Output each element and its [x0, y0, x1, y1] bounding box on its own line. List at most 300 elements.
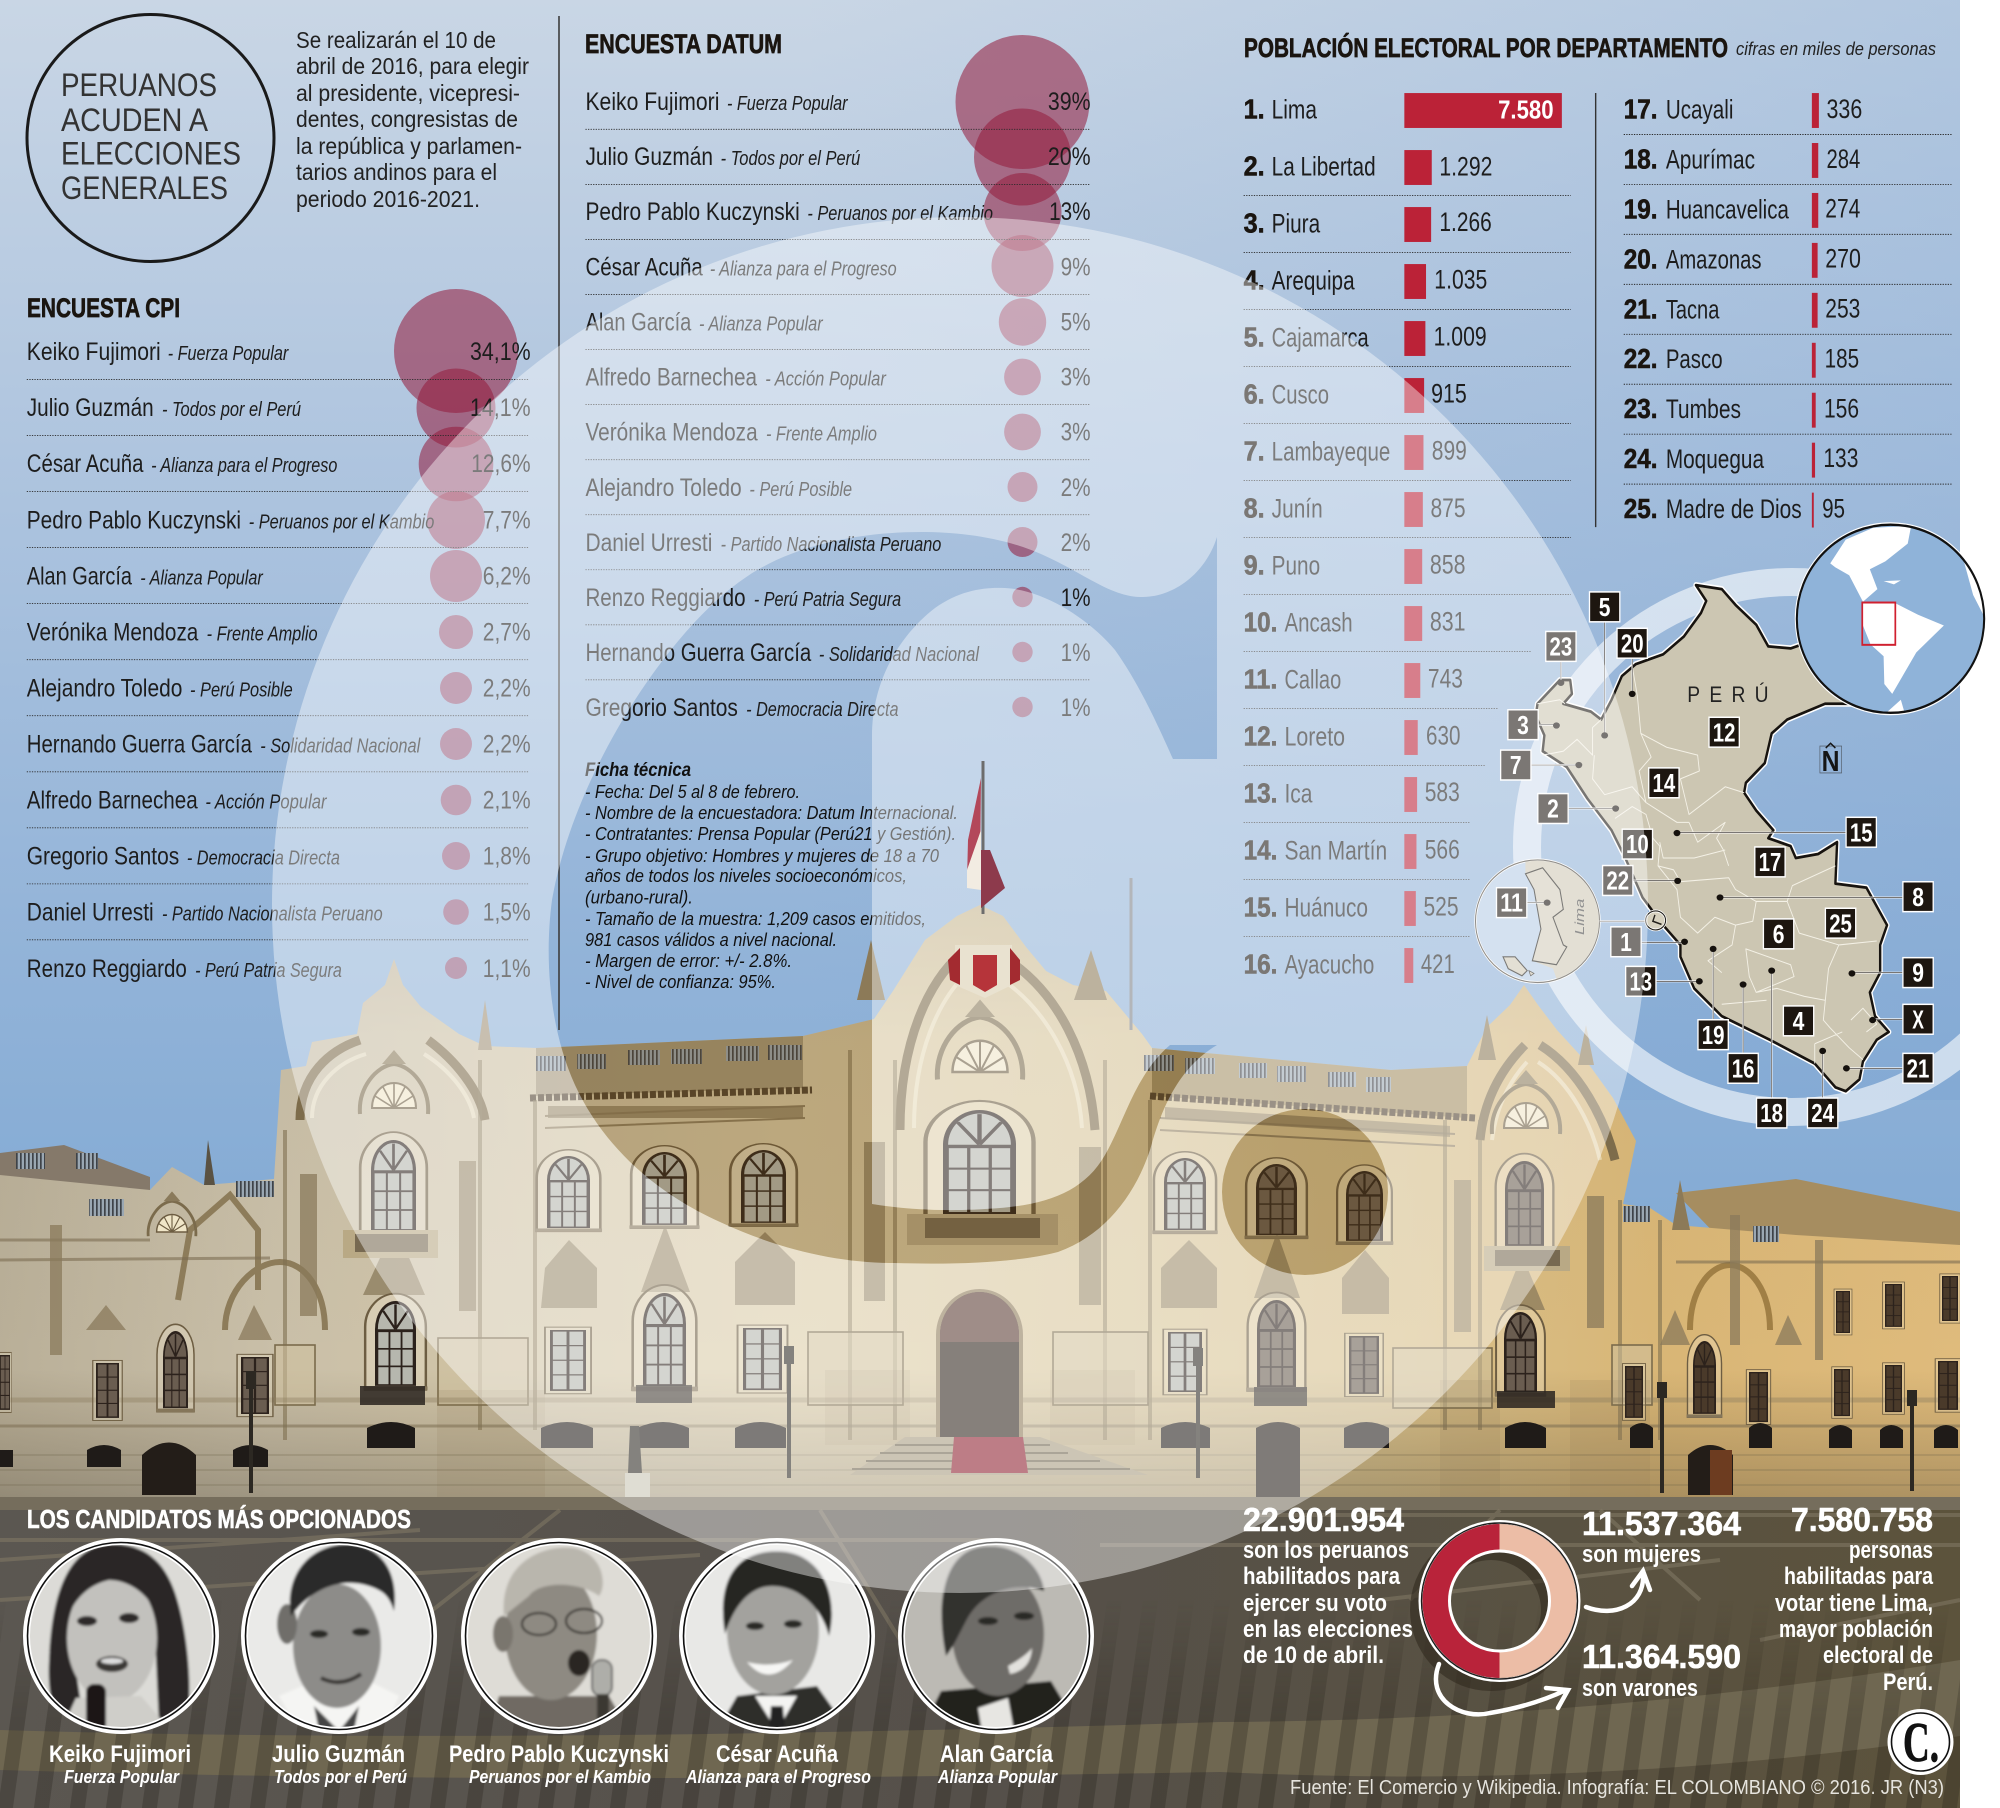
stat: Lima voters: habilitadas para [1784, 1563, 1934, 1590]
row: Moquegua: 133 [1823, 444, 1858, 474]
stat: total voters: habilitados para [1243, 1563, 1401, 1590]
row: Ica: 13. [1244, 777, 1277, 809]
row: Junín: 875 [1430, 494, 1466, 523]
title circle: ELECCIONES [61, 136, 241, 172]
row: Daniel Urresti: 1,5% [483, 899, 531, 927]
caption: Alan García: Alianza Popular [937, 1766, 1059, 1787]
map: department borders [1537, 666, 1877, 1064]
row: Moquegua [1624, 443, 1858, 478]
heading: población electoral: cifras en miles de personas [1736, 39, 1936, 59]
row: Cusco: 915 [1431, 379, 1467, 409]
row: Verónika Mendoza: 2,7% [483, 619, 531, 647]
row: Puno: 858 [1430, 550, 1466, 580]
caption: Keiko Fujimori [49, 1741, 191, 1787]
row: Pedro Pablo Kuczynski: - Peruanos por el Kambio [249, 511, 434, 533]
row: César Acuña: 9% [1061, 254, 1091, 281]
row: Alan García: Alan García [27, 563, 133, 590]
map: numbered department labels [1497, 592, 1933, 1128]
row: Pedro Pablo Kuczynski: 7,7% [483, 507, 531, 534]
row: Junín: 8. [1244, 492, 1265, 524]
row: Ayacucho: 16. [1244, 948, 1277, 980]
map: numbered department labels: 17 [1759, 849, 1781, 877]
row: Alfredo Barnechea: - Acción Popular [765, 368, 887, 390]
text block: ficha técnica: - Fecha: Del 5 al 8 de febrero. [585, 781, 800, 802]
stat: women: son mujeres [1582, 1541, 1701, 1568]
portrait: Keiko Fujimori [23, 1538, 219, 1734]
intro paragraph: Se realizarán el 10 de [296, 27, 496, 53]
row: Apurímac [1624, 143, 1860, 178]
row: Renzo Reggiardo [27, 955, 531, 983]
row: Piura: 3. [1244, 207, 1265, 239]
row: Hernando Guerra García: Hernando Guerra García [585, 640, 812, 667]
row: Gregorio Santos: Gregorio Santos [27, 843, 179, 871]
row: Puno: 9. [1244, 549, 1265, 581]
row: Tumbes: 156 [1824, 394, 1859, 424]
stat: women: 11.537.364 [1582, 1505, 1742, 1542]
row: Cusco: Cusco [1272, 380, 1329, 410]
intro paragraph [296, 27, 529, 212]
table: población electoral 17 to 25 [1596, 93, 1952, 528]
row: Alfredo Barnechea: - Acción Popular [205, 791, 328, 814]
row: Verónika Mendoza: Verónika Mendoza [27, 619, 199, 647]
row: Puno [1244, 549, 1466, 584]
row: Lima: 7.580 [1498, 96, 1554, 125]
row: Puno: Puno [1272, 551, 1320, 581]
caption: Julio Guzmán: Todos por el Perú [274, 1766, 407, 1787]
title circle [27, 14, 274, 262]
row: San Martín: 14. [1244, 834, 1277, 866]
row: Ancash [1244, 606, 1466, 641]
table: Encuesta Datum rows [585, 89, 1091, 722]
table: Encuesta CPI rows [27, 339, 531, 983]
text block: ficha técnica: - Nivel de confianza: 95%. [585, 971, 776, 992]
row: Arequipa: Arequipa [1272, 266, 1355, 296]
row: Keiko Fujimori [585, 89, 1091, 116]
row: Arequipa: 1.035 [1434, 265, 1487, 295]
row: Verónika Mendoza: - Frente Amplio [766, 423, 877, 446]
row: Verónika Mendoza: Verónika Mendoza [585, 419, 758, 447]
portrait: Alan García [898, 1538, 1094, 1734]
intro paragraph: periodo 2016-2021. [296, 186, 480, 212]
map: numbered department labels: 23 [1550, 633, 1572, 662]
stat: total voters: son los peruanos [1243, 1537, 1409, 1564]
portrait: César Acuña [679, 1538, 875, 1734]
row: Ancash: 831 [1430, 607, 1466, 637]
row: César Acuña [585, 254, 1091, 281]
row: Gregorio Santos [585, 695, 1091, 722]
row: Amazonas: 270 [1825, 244, 1861, 274]
intro paragraph: dentes, congresistas de [296, 106, 518, 132]
map: numbered department labels: 24 [1811, 1100, 1834, 1128]
row: Alfredo Barnechea: Alfredo Barnechea [27, 787, 198, 815]
stat: total voters: en las elecciones [1243, 1616, 1413, 1643]
source credit: Fuente: El Comercio y Wikipedia. Infografía: EL COLOMBIANO © 2016. JR (N3) [1290, 1777, 1944, 1799]
row: Lima: 1. [1244, 93, 1265, 125]
row: Hernando Guerra García: 2,2% [483, 731, 531, 759]
map: numbered department labels: 4 [1793, 1008, 1805, 1036]
row: Lambayeque: Lambayeque [1272, 437, 1390, 467]
row: Keiko Fujimori: 34,1% [470, 339, 531, 366]
row: Moquegua: Moquegua [1666, 445, 1765, 475]
map: numbered department labels: 5 [1599, 594, 1611, 622]
row: Callao: 743 [1428, 664, 1463, 694]
map: country shape [1536, 585, 1889, 1091]
row: Piura: Piura [1272, 209, 1321, 239]
row: Pedro Pablo Kuczynski: - Peruanos por el Kambio [807, 203, 993, 225]
map: country outline [1536, 585, 1889, 1091]
stat: Lima voters: electoral de [1823, 1642, 1933, 1669]
row: Cajamarca: Cajamarca [1272, 323, 1369, 353]
row: Huánuco: 15. [1244, 891, 1277, 923]
row: Verónika Mendoza [585, 419, 1091, 447]
row: Daniel Urresti: - Partido Nacionalista Peruano [162, 903, 383, 926]
title circle: PERUANOS [61, 67, 217, 103]
map: numbered department labels: 15 [1850, 819, 1873, 848]
caption: Keiko Fujimori: Fuerza Popular [64, 1766, 181, 1787]
title circle: ACUDEN A [61, 102, 209, 138]
donut chart: women and men [1420, 1522, 1578, 1680]
row: César Acuña: 12,6% [471, 451, 531, 478]
row: Huánuco: 525 [1423, 892, 1459, 922]
caption: Pedro Pablo Kuczynski [449, 1741, 669, 1787]
building main door [936, 1289, 1023, 1440]
row: Ica: Ica [1284, 779, 1313, 809]
row: Apurímac: 284 [1827, 145, 1860, 174]
map: numbered department labels: 3 [1517, 711, 1529, 740]
row: César Acuña: - Alianza para el Progreso [710, 258, 897, 280]
row: La Libertad: 1.292 [1439, 152, 1492, 182]
row: Daniel Urresti: 2% [1061, 530, 1091, 557]
photo: Palacio de Gobierno building [0, 878, 1961, 1505]
map: numbered department labels: 11 [1500, 889, 1523, 918]
row: Huánuco [1244, 891, 1459, 926]
map: numbered department labels: 12 [1713, 719, 1736, 748]
locator rectangle on globe [1862, 603, 1895, 645]
row: Tacna [1624, 293, 1860, 328]
row: Lima [1244, 93, 1562, 128]
row: Cajamarca: 1.009 [1434, 322, 1487, 352]
row: Renzo Reggiardo: - Perú Patria Segura [754, 589, 901, 611]
row: San Martín: 566 [1425, 835, 1460, 865]
row: Julio Guzmán: Julio Guzmán [27, 395, 154, 422]
row: Pedro Pablo Kuczynski: Pedro Pablo Kuczynski [27, 507, 241, 534]
row: Alfredo Barnechea: 3% [1061, 364, 1091, 391]
row: Tacna: 21. [1624, 293, 1658, 325]
text block: ficha técnica: - Contratantes: Prensa Popular (Perú21 y Gestión). [585, 823, 956, 844]
row: Julio Guzmán: - Todos por el Perú [721, 148, 860, 170]
second flagpole [1130, 878, 1132, 1030]
row: Renzo Reggiardo: Renzo Reggiardo [27, 955, 187, 983]
row: Gregorio Santos [27, 843, 531, 871]
locator globe [1795, 522, 1990, 724]
row: Alfredo Barnechea: Alfredo Barnechea [585, 364, 758, 391]
row: Alfredo Barnechea [27, 787, 531, 815]
map: numbered department labels: 14 [1653, 770, 1676, 798]
row: Madre de Dios: 95 [1822, 494, 1845, 524]
map: numbered department labels: 13 [1629, 968, 1652, 997]
row: La Libertad [1244, 150, 1492, 185]
row: Gregorio Santos: 1% [1061, 695, 1091, 722]
heading: Encuesta Datum: ENCUESTA DATUM [585, 29, 782, 59]
row: Pasco: 185 [1825, 344, 1859, 374]
flag of Peru [967, 761, 1005, 914]
map: numbered department labels: 18 [1760, 1100, 1783, 1128]
row: Keiko Fujimori [27, 339, 531, 366]
row: Huancavelica: 274 [1825, 194, 1860, 224]
portrait: Julio Guzmán [241, 1538, 437, 1734]
portrait: Pedro Pablo Kuczynski [461, 1538, 657, 1734]
text block: ficha técnica: Ficha técnica [585, 760, 691, 781]
row: Keiko Fujimori: Keiko Fujimori [27, 339, 161, 366]
bubble chart: Datum [956, 35, 1090, 717]
text block: ficha técnica: 981 casos válidos a nivel nacional. [585, 929, 837, 950]
row: Madre de Dios [1624, 493, 1845, 528]
row: Piura: 1.266 [1439, 208, 1492, 238]
row: Renzo Reggiardo [585, 585, 1091, 612]
row: Lambayeque [1244, 435, 1467, 470]
row: Amazonas: 20. [1624, 243, 1658, 275]
heading: Encuesta CPI: ENCUESTA CPI [27, 293, 180, 323]
map: numbered department labels: 21 [1907, 1055, 1929, 1084]
row: Amazonas [1624, 243, 1861, 278]
caption: Alan García [937, 1741, 1059, 1787]
row: Tumbes [1624, 393, 1859, 428]
row: Hernando Guerra García: Hernando Guerra García [27, 731, 252, 759]
heading: población electoral: POBLACIÓN ELECTORAL POR DEPARTAMENTO [1244, 32, 1728, 63]
row: Ayacucho: 421 [1421, 949, 1455, 979]
row: Hernando Guerra García: - Solidaridad Nacional [260, 735, 421, 758]
map: leader lines [1525, 621, 1904, 1099]
watermark: large translucent C logo [272, 217, 1648, 1593]
map of Peru [1475, 585, 1933, 1128]
spires on the roof [204, 940, 1690, 1230]
row: Cajamarca: 5. [1244, 321, 1265, 353]
row: Madre de Dios: Madre de Dios [1666, 495, 1802, 524]
row: Huánuco: Huánuco [1284, 893, 1368, 923]
row: Hernando Guerra García [585, 640, 1091, 667]
row: Julio Guzmán [27, 395, 531, 422]
stat: total voters: ejercer su voto [1243, 1590, 1387, 1617]
row: Cusco [1244, 378, 1467, 413]
caption: Keiko Fujimori: Keiko Fujimori [49, 1741, 191, 1768]
row: Daniel Urresti: - Partido Nacionalista Peruano [721, 534, 941, 556]
row: Ancash: Ancash [1284, 608, 1353, 638]
map: numbered department labels: 8 [1912, 883, 1924, 912]
map: numbered department labels: 20 [1621, 630, 1644, 659]
row: Alfredo Barnechea [585, 364, 1091, 391]
row: San Martín: San Martín [1284, 836, 1387, 866]
row: Lima: Lima [1272, 95, 1318, 125]
row: Ayacucho: Ayacucho [1284, 950, 1374, 980]
row: Alejandro Toledo [27, 675, 531, 703]
caption: César Acuña [685, 1741, 871, 1787]
row: San Martín [1244, 834, 1460, 869]
row: Piura [1244, 207, 1492, 242]
row: Lambayeque: 899 [1432, 436, 1467, 466]
row: Alan García [585, 309, 1091, 336]
row: Pedro Pablo Kuczynski [27, 507, 531, 534]
row: Madre de Dios: 25. [1624, 493, 1658, 524]
row: La Libertad: 2. [1244, 150, 1265, 182]
title circle: GENERALES [61, 170, 228, 206]
row: Lambayeque: 7. [1244, 435, 1265, 467]
row: Daniel Urresti [27, 899, 531, 927]
map: numbered department labels: 6 [1773, 921, 1784, 949]
row: Cajamarca [1244, 321, 1487, 356]
text block: ficha técnica: - Nombre de la encuestadora: Datum Internacional. [585, 802, 958, 823]
text block: ficha técnica: - Margen de error: +/- 2.8%. [585, 950, 792, 971]
row: Keiko Fujimori: Keiko Fujimori [585, 89, 719, 116]
row: César Acuña: César Acuña [27, 451, 144, 478]
row: Alan García: 5% [1061, 309, 1091, 336]
caption: Pedro Pablo Kuczynski: Peruanos por el Kambio [469, 1766, 651, 1787]
map: north symbol: N [1822, 745, 1840, 777]
row: Verónika Mendoza: 3% [1061, 419, 1091, 447]
intro paragraph: la república y parlamen- [296, 133, 522, 159]
row: Junín [1244, 492, 1466, 527]
row: Julio Guzmán: - Todos por el Perú [162, 399, 301, 421]
intro paragraph: al presidente, vicepresi- [296, 80, 520, 106]
row: Julio Guzmán: 14,1% [470, 395, 531, 422]
stat: Lima voters: 7.580.758 [1791, 1501, 1933, 1538]
logo: El Colombiano [1888, 1709, 1954, 1775]
row: Alejandro Toledo: - Perú Posible [749, 478, 852, 501]
row: Julio Guzmán: 20% [1048, 144, 1091, 171]
row: Callao: Callao [1284, 665, 1341, 695]
stat: total voters: 22.901.954 [1243, 1501, 1405, 1538]
stat: Lima voters: Perú. [1883, 1669, 1933, 1696]
map: numbered department labels: 7 [1510, 752, 1522, 781]
caption: César Acuña: Alianza para el Progreso [685, 1766, 871, 1787]
table: población electoral 1 to 16 [1244, 93, 1571, 983]
text block: ficha técnica: años de todos los niveles socioeconómicos, [585, 865, 907, 886]
row: Ica [1244, 777, 1460, 812]
text block: ficha técnica: - Tamaño de la muestra: 1,209 casos emitidos, [585, 908, 926, 929]
row: Alan García: Alan García [585, 309, 692, 336]
main stairs [850, 1437, 1148, 1475]
row: Gregorio Santos: - Democracia Directa [746, 699, 899, 721]
row: Gregorio Santos: 1,8% [483, 843, 531, 871]
row: Renzo Reggiardo: 1% [1061, 585, 1091, 612]
row: Moquegua: 24. [1624, 443, 1658, 475]
row: Renzo Reggiardo: 1,1% [483, 955, 531, 983]
map: numbered department labels: 2 [1547, 795, 1559, 824]
right page margin [1960, 0, 2000, 1808]
row: Apurímac: 18. [1624, 143, 1658, 175]
central coat of arms [948, 945, 1020, 998]
map: numbered department labels: 25 [1829, 910, 1852, 939]
row: Gregorio Santos: Gregorio Santos [585, 695, 738, 722]
row: Daniel Urresti: Daniel Urresti [585, 530, 712, 557]
row: Gregorio Santos: - Democracia Directa [187, 847, 340, 870]
row: Callao [1244, 663, 1463, 698]
heading: los candidatos más opcionados: LOS CANDIDATOS MÁS OPCIONADOS [27, 1504, 411, 1534]
intro paragraph: abril de 2016, para elegir [296, 53, 529, 79]
row: Hernando Guerra García: - Solidaridad Nacional [819, 644, 980, 666]
row: Callao: 11. [1244, 663, 1277, 695]
stat: Lima voters: votar tiene Lima, [1775, 1590, 1933, 1617]
map: numbered department labels: 16 [1732, 1055, 1754, 1084]
row: Verónika Mendoza [27, 619, 531, 647]
row: Alejandro Toledo: 2,2% [483, 675, 531, 703]
row: Alan García: - Alianza Popular [699, 313, 824, 335]
map: country name: PERÚ [1687, 683, 1769, 707]
row: Ucayali [1624, 93, 1862, 128]
row: Alan García: - Alianza Popular [140, 567, 264, 589]
stat: men: son varones [1582, 1675, 1698, 1702]
row: Alejandro Toledo: Alejandro Toledo [27, 675, 182, 703]
row: Julio Guzmán [585, 144, 1091, 171]
row: Alan García [27, 563, 531, 590]
row: Alan García: 6,2% [483, 563, 531, 590]
caption: César Acuña: César Acuña [716, 1741, 839, 1768]
row: César Acuña [27, 451, 531, 478]
row: Ucayali: Ucayali [1666, 95, 1733, 125]
row: Tacna: Tacna [1666, 295, 1720, 325]
row: Pasco [1624, 343, 1859, 378]
intro paragraph: tarios andinos para el [296, 159, 497, 185]
map: numbered department labels: 9 [1912, 959, 1924, 988]
map: numbered department labels: 1 [1620, 928, 1632, 957]
row: Keiko Fujimori: - Fuerza Popular [168, 343, 290, 365]
stat: men [1582, 1638, 1741, 1702]
row: Alejandro Toledo: - Perú Posible [190, 679, 293, 702]
row: Loreto [1244, 720, 1460, 755]
row: Renzo Reggiardo: Renzo Reggiardo [585, 585, 746, 612]
bubble chart: CPI [394, 289, 518, 979]
row: Hernando Guerra García: 1% [1061, 640, 1091, 667]
map: numbered department labels: 10 [1626, 831, 1649, 860]
row: Arequipa: 4. [1244, 264, 1265, 296]
row: Verónika Mendoza: - Frente Amplio [207, 623, 318, 646]
row: Huancavelica [1624, 193, 1860, 228]
stat: men: 11.364.590 [1582, 1638, 1741, 1675]
map: numbered department labels: 19 [1702, 1021, 1724, 1050]
row: Huancavelica: Huancavelica [1666, 195, 1790, 225]
arrow to women [1586, 1571, 1650, 1611]
row: Keiko Fujimori: 39% [1048, 89, 1091, 116]
row: Renzo Reggiardo: - Perú Patria Segura [195, 959, 342, 982]
candidate names [49, 1741, 1059, 1787]
row: Julio Guzmán: Julio Guzmán [585, 144, 713, 171]
row: Tumbes: Tumbes [1666, 395, 1741, 425]
row: Amazonas: Amazonas [1666, 245, 1761, 275]
row: Junín: Junín [1272, 494, 1323, 524]
stat: Lima voters: personas [1849, 1537, 1933, 1564]
text block: ficha técnica [585, 760, 958, 992]
row: Pedro Pablo Kuczynski: 13% [1049, 199, 1091, 226]
map: inset of Lima and Callao [1475, 854, 1666, 988]
column separator [558, 16, 560, 1030]
map: numbered department labels: 22 [1606, 867, 1629, 896]
caption: Julio Guzmán: Julio Guzmán [272, 1741, 405, 1768]
street lamps and statue [246, 1346, 1917, 1505]
text block: ficha técnica: (urbano-rural). [585, 886, 693, 908]
caption: Julio Guzmán [272, 1741, 407, 1787]
logo: El Colombiano: C. [1903, 1712, 1939, 1774]
row: Daniel Urresti [585, 530, 1091, 557]
map: inset of Lima and Callao: Lima [1572, 898, 1587, 935]
row: Loreto: 12. [1244, 720, 1277, 752]
row: Pedro Pablo Kuczynski: Pedro Pablo Kuczynski [585, 199, 800, 226]
row: Pedro Pablo Kuczynski [585, 199, 1091, 226]
row: Pasco: Pasco [1666, 345, 1723, 375]
row: Tumbes: 23. [1624, 393, 1658, 425]
row: Apurímac: Apurímac [1666, 145, 1755, 175]
map: numbered department labels: X [1912, 1006, 1924, 1035]
row: Huancavelica: 19. [1624, 193, 1658, 225]
row: Alejandro Toledo: Alejandro Toledo [585, 474, 742, 502]
